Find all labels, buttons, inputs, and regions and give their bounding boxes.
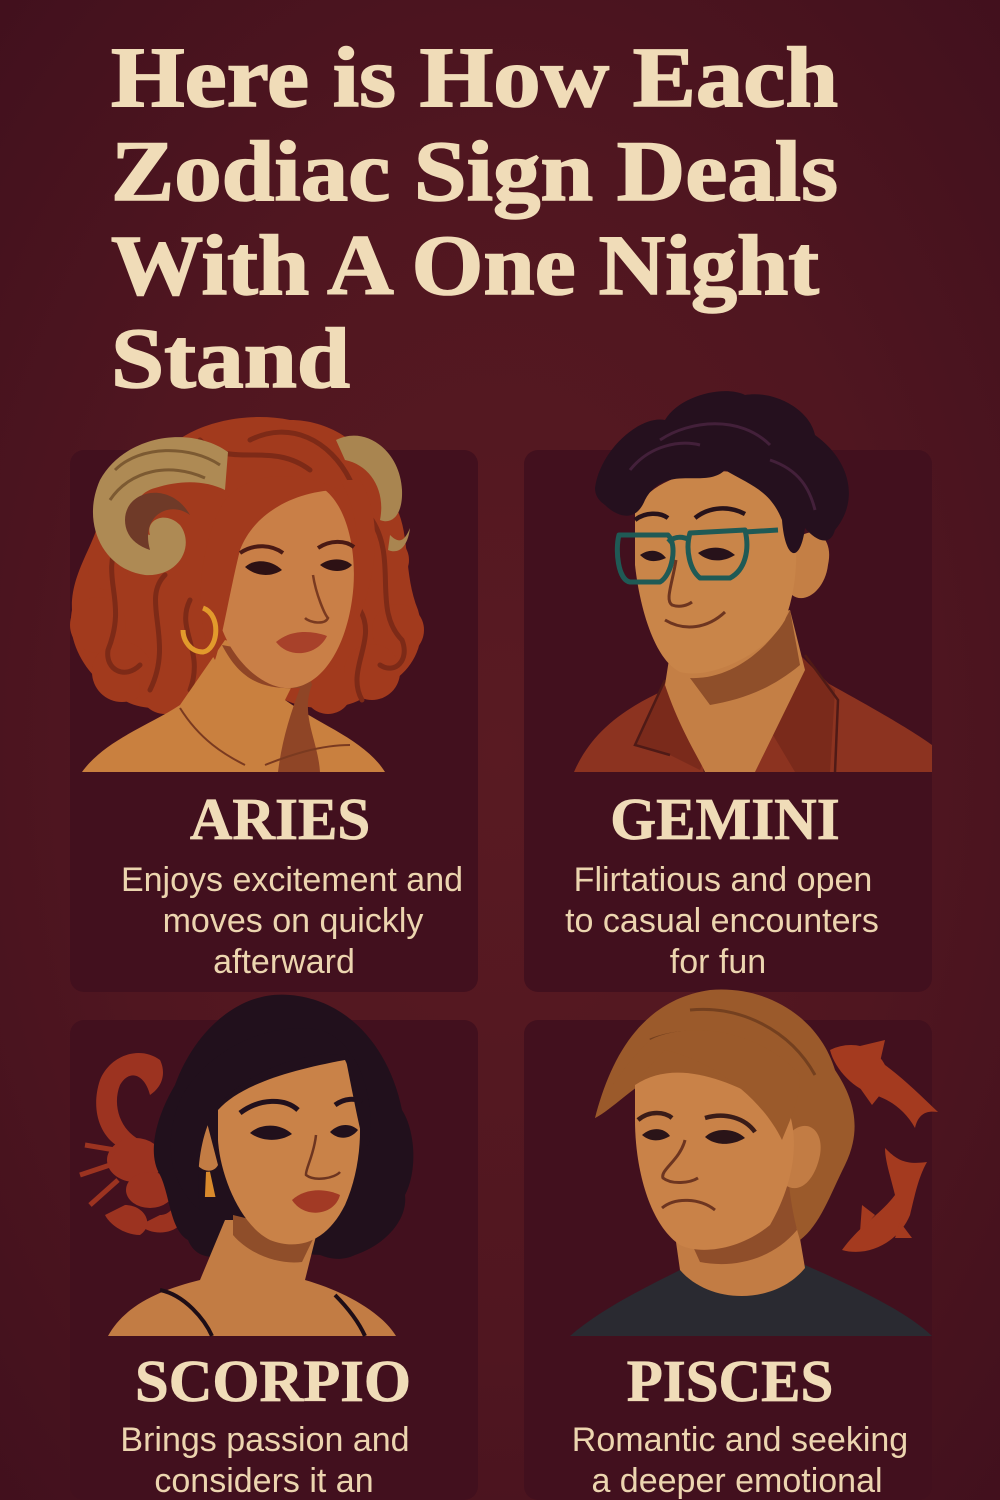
title: Here is How Each	[111, 29, 838, 125]
eyes brows nose mouth	[638, 1113, 755, 1132]
pisces description: a deeper emotional	[591, 1462, 883, 1500]
panel: scorpio	[70, 995, 478, 1500]
title	[111, 29, 838, 406]
panel: aries	[70, 417, 478, 992]
hair mass with curls	[70, 417, 424, 714]
title: Stand	[111, 310, 350, 406]
aries portrait	[70, 417, 424, 772]
pisces heading: PISCES	[627, 1348, 833, 1414]
neck and shoulders	[82, 640, 385, 772]
face	[635, 1073, 794, 1250]
hair	[595, 391, 849, 553]
neck	[670, 1180, 805, 1296]
gemini description: Flirtatious and open	[574, 861, 872, 899]
aries description	[121, 861, 463, 981]
face	[635, 471, 796, 673]
gemini description: to casual encounters	[565, 902, 879, 940]
pisces portrait	[570, 990, 938, 1336]
neck and shoulders	[108, 1220, 396, 1336]
ear	[785, 1126, 821, 1188]
eyes brows nose lips	[240, 542, 354, 553]
scorpio heading: SCORPIO	[135, 1348, 411, 1414]
gemini heading: GEMINI	[610, 786, 840, 852]
glasses	[617, 530, 778, 582]
tee	[570, 1265, 932, 1336]
title: With A One Night	[111, 217, 819, 313]
aries description: moves on quickly	[163, 902, 423, 940]
scorpio portrait	[80, 995, 413, 1336]
hair fringe	[595, 1030, 800, 1140]
hair front	[340, 480, 375, 620]
hair	[595, 990, 855, 1240]
face	[218, 1060, 360, 1244]
aries description: afterward	[213, 943, 355, 981]
hair back	[154, 995, 413, 1259]
pisces description: Romantic and seeking	[572, 1421, 908, 1459]
hair front	[171, 1028, 371, 1210]
panel: pisces	[524, 990, 938, 1500]
aries description: Enjoys excitement and	[121, 861, 463, 899]
scorpio description: Brings passion and	[120, 1421, 410, 1459]
fish lower	[842, 1148, 927, 1252]
fish upper	[830, 1040, 938, 1128]
shirt	[574, 665, 932, 772]
earring	[183, 608, 216, 652]
aries heading: ARIES	[190, 786, 370, 852]
scorpio description: considers it an	[154, 1462, 374, 1500]
gemini description	[565, 861, 879, 981]
horn left	[93, 437, 228, 575]
title: Zodiac Sign Deals	[111, 123, 838, 219]
face	[216, 489, 354, 688]
eyes brows nose lips	[240, 1099, 362, 1113]
neck	[665, 610, 805, 772]
gemini description: for fun	[670, 943, 766, 981]
nose and mouth	[665, 560, 725, 627]
pisces description	[572, 1421, 908, 1500]
scorpio description	[120, 1421, 410, 1500]
eyes	[640, 548, 735, 561]
horn right	[336, 436, 402, 521]
ear	[792, 532, 829, 598]
ear	[189, 1114, 218, 1171]
gemini portrait	[574, 391, 932, 772]
scorpion	[96, 1053, 192, 1235]
panel: gemini	[524, 391, 932, 992]
